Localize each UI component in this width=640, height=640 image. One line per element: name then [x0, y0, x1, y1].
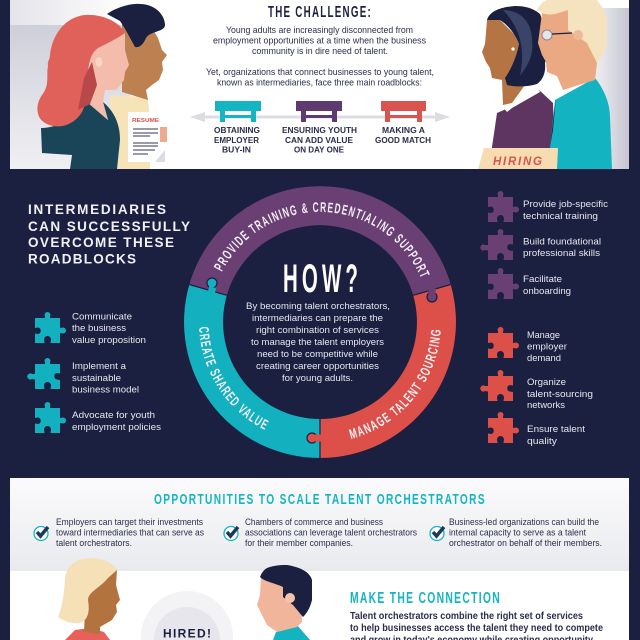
text: business-led organizations: orchestrator on behalf of their members. — [449, 538, 602, 548]
resume document — [128, 112, 167, 162]
text: how description: intermediaries can prepare the — [252, 313, 383, 323]
icon: check 1 — [34, 526, 48, 540]
icon: check 3 — [430, 526, 444, 540]
panel: the challenge — [10, 0, 629, 169]
heading: intermediaries can overcome roadblocks: INTERMEDIARIES — [28, 202, 166, 217]
text: talent quality: quality — [527, 436, 557, 446]
text: make the connection description: Talent orchestrators combine the right set of services — [350, 611, 583, 622]
text: employer demand: demand — [527, 353, 561, 363]
icon: teal puzzle piece 1 — [35, 312, 66, 343]
text: employer demand: Manage — [527, 330, 560, 340]
icon: teal roadblock — [215, 101, 261, 122]
icon: purple puzzle piece 3 — [488, 268, 519, 299]
ring segment: red — [320, 284, 456, 458]
illustration: woman — [58, 558, 120, 640]
panel: opportunities — [10, 478, 629, 640]
text: how description — [246, 301, 390, 383]
text: chambers of commerce: Chambers of commerce and business — [245, 517, 383, 527]
text: employers — [56, 517, 204, 548]
icon: red puzzle piece 2 — [480, 370, 513, 401]
label: obtaining employer buy-in: BUY-IN — [222, 144, 251, 154]
text: talent quality: Ensure talent — [527, 424, 585, 434]
label: making a good match: MAKING A — [382, 125, 425, 135]
text: how description: By becoming talent orchestrators, — [246, 301, 390, 311]
illustration: young man and woman with resume — [37, 4, 167, 169]
ring segment: teal — [184, 284, 320, 458]
chart: services ring — [184, 186, 456, 458]
heading: make the connection: MAKE THE CONNECTION — [350, 590, 501, 607]
text: challenge description: community is in dire need of talent. — [252, 46, 388, 56]
label: ensuring youth can add value — [282, 125, 357, 154]
text: business-led organizations: Business-led organizations can build the — [449, 517, 599, 527]
text: make the connection description — [350, 611, 603, 640]
text: talent-sourcing networks — [527, 377, 593, 410]
heading: the challenge: THE CHALLENGE: — [268, 4, 372, 21]
text: advocate: Advocate for youth — [72, 410, 155, 420]
hiring sign: HIRING — [493, 156, 542, 168]
icon: purple puzzle piece 1 — [488, 191, 519, 222]
heading: intermediaries can overcome roadblocks: OVERCOME THESE — [28, 235, 174, 250]
label: obtaining employer buy-in: EMPLOYER — [214, 135, 260, 145]
ring label: create shared value: CREATE SHARED VALUE — [199, 327, 269, 430]
text: professional skills — [523, 236, 601, 258]
text: professional skills: professional skills — [523, 248, 600, 258]
text: challenge description: Young adults are increasingly disconnected from — [226, 25, 413, 35]
text: challenge description: known as intermediaries, face three main roadblocks: — [217, 78, 422, 88]
heading: intermediaries can overcome roadblocks: CAN SUCCESSFULLY — [28, 219, 190, 234]
text: sustainable business model: business model — [72, 384, 139, 394]
text: sustainable business model: Implement a — [72, 361, 127, 371]
illustration: man — [257, 565, 312, 640]
text: challenge description: Yet, organizations that connect businesses to young talent, — [206, 67, 434, 77]
label: ensuring youth can add value: CAN ADD VALUE — [285, 135, 353, 145]
illustration: employers hiring — [478, 0, 612, 169]
text: how description: right combination of services — [256, 325, 379, 335]
glasses — [542, 30, 572, 40]
text: chambers of commerce — [245, 517, 417, 548]
text: sustainable business model: sustainable — [72, 373, 121, 383]
text: employer demand: employer — [527, 342, 567, 352]
badge: hired — [141, 591, 233, 640]
text: how description: creating career opportunities — [256, 361, 379, 371]
text: employers: Employers can target their investments — [56, 517, 203, 527]
text: talent-sourcing networks: Organize — [527, 377, 566, 387]
heading: how: HOW? — [283, 257, 362, 301]
icon: teal puzzle piece 2 — [27, 358, 60, 389]
icon: red roadblock — [381, 101, 426, 122]
text: talent-sourcing networks: networks — [527, 400, 565, 410]
text: technical training: technical training — [523, 211, 598, 221]
text: communicate value — [72, 312, 146, 345]
label: making a good match — [375, 125, 431, 145]
icon: red puzzle piece 3 — [488, 412, 519, 443]
label: ensuring youth can add value: ENSURING YOUTH — [282, 125, 357, 135]
text: onboarding: onboarding — [523, 286, 571, 296]
heading: intermediaries can overcome roadblocks: ROADBLOCKS — [28, 252, 136, 266]
text: advocate: employment policies — [72, 422, 161, 432]
text: professional skills: Build foundational — [523, 236, 601, 246]
label: ensuring youth can add value: ON DAY ONE — [294, 144, 344, 154]
label: obtaining employer buy-in: OBTAINING — [214, 125, 260, 135]
ring label: manage talent sourcing: MANAGE TALENT SOURCING — [348, 330, 441, 439]
text: talent-sourcing networks: talent-sourcing — [527, 389, 593, 399]
text: technical training — [523, 199, 608, 221]
text: how description: for young adults. — [282, 373, 353, 383]
icon: red puzzle piece 1 — [488, 327, 519, 358]
text: business-led organizations — [449, 517, 602, 548]
text: make the connection description: to help businesses access the talent they need to compete — [350, 623, 603, 634]
text: onboarding: Facilitate — [523, 274, 562, 284]
resume document: RESUME — [132, 118, 159, 124]
heading: intermediaries can overcome roadblocks — [28, 202, 190, 266]
text: communicate value: the business — [72, 323, 126, 333]
heading: opportunities to scale: OPPORTUNITIES TO SCALE TALENT ORCHESTRATORS — [154, 491, 486, 508]
text: employers: toward intermediaries that can serve as — [56, 528, 204, 538]
text: how description: to manage the talent employers — [251, 337, 384, 347]
arrow: double-headed roadblock track — [190, 112, 450, 122]
text: business-led organizations: internal capacity to serve as a talent — [449, 528, 586, 538]
hiring sign — [478, 148, 558, 169]
text: sustainable business model — [72, 361, 139, 394]
icon: purple roadblock — [296, 101, 342, 122]
text: talent quality — [527, 424, 585, 446]
text: how description: need to be competitive while — [257, 349, 378, 359]
ring segment: purple — [189, 186, 451, 295]
text: onboarding — [523, 274, 571, 296]
ring label: provide training: PROVIDE TRAINING & CREDENTIALING SUPPORT — [214, 202, 430, 277]
label: obtaining employer buy-in — [214, 125, 260, 154]
icon: teal puzzle piece 3 — [35, 402, 66, 433]
text: challenge description — [206, 25, 434, 88]
icon: purple puzzle piece 2 — [480, 229, 513, 260]
text: employers: talent orchestrators. — [56, 538, 132, 548]
text: technical training: Provide job-specific — [523, 199, 608, 209]
icon: check 2 — [224, 526, 238, 540]
text: communicate value: value proposition — [72, 335, 146, 345]
text: communicate value: Communicate — [72, 312, 132, 322]
label: making a good match: GOOD MATCH — [375, 135, 431, 145]
text: employer demand — [527, 330, 567, 363]
text: challenge description: employment opportunities at a time when the business — [213, 36, 426, 46]
text: chambers of commerce: for their member companies. — [245, 538, 353, 548]
text: chambers of commerce: associations can leverage talent orchestrators — [245, 528, 417, 538]
text: advocate — [72, 410, 161, 432]
